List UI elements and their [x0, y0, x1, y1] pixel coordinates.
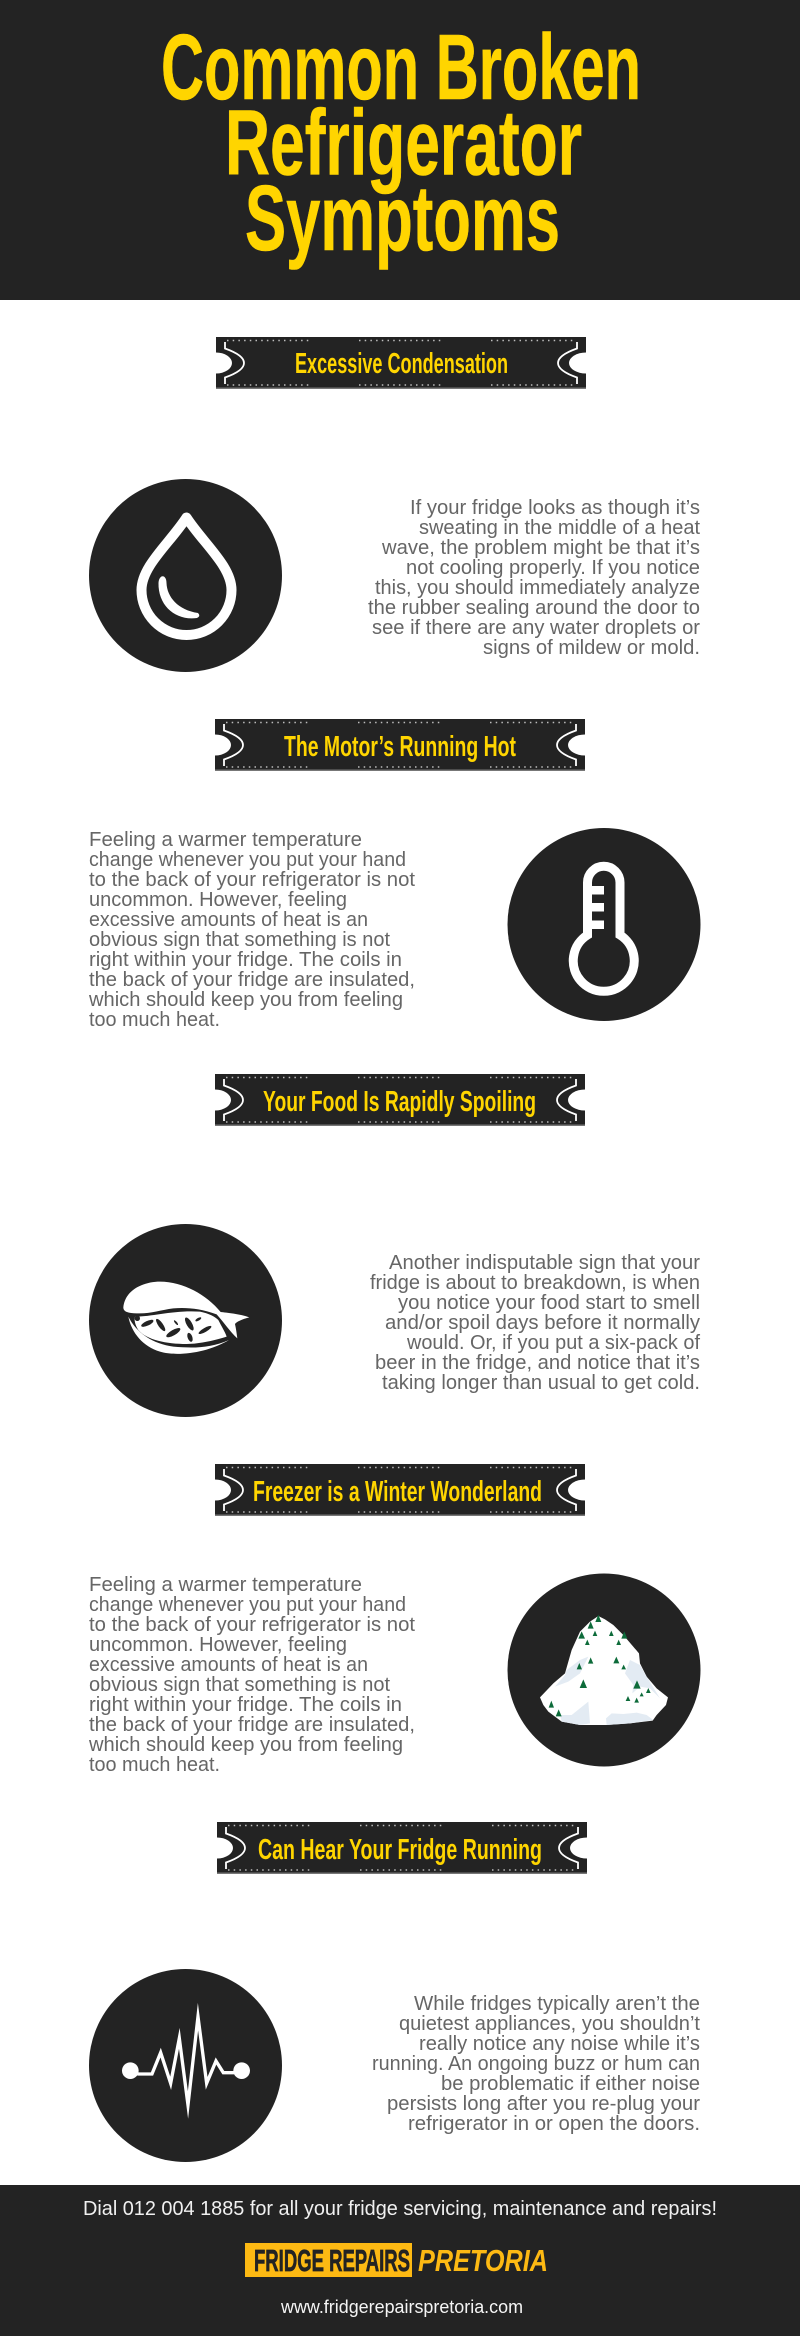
text: spoiling description: and/or spoil days before it normally — [385, 1312, 700, 1334]
text: motor description — [88, 829, 415, 1031]
text: spoiling description: you notice your food start to smell — [398, 1292, 700, 1314]
text: condensation description: not cooling properly. If you notice — [406, 557, 700, 579]
text: condensation description: this, you should immediately analyze — [375, 577, 700, 599]
icon: thermometer — [508, 828, 700, 1021]
text: condensation description: wave, the problem might be that it’s — [381, 537, 700, 559]
text: freezer description: excessive amounts of heat is an — [89, 1654, 368, 1676]
text: motor description: obvious sign that something is not — [89, 929, 390, 951]
text: motor description: too much heat. — [89, 1009, 220, 1031]
text: spoiling description: would. Or, if you put a six-pack of — [406, 1332, 700, 1354]
text: noise description: refrigerator in or open the doors. — [408, 2113, 700, 2135]
text: condensation description: signs of mildew or mold. — [483, 637, 700, 659]
text: motor description: uncommon. However, feeling — [89, 889, 347, 911]
text: noise description: While fridges typically aren’t the — [414, 1993, 700, 2015]
text: freezer description: the back of your fridge are insulated, — [89, 1714, 415, 1736]
text: spoiling description — [370, 1252, 700, 1394]
text: freezer description: which should keep you from feeling — [88, 1734, 403, 1756]
text: freezer description — [88, 1574, 415, 1776]
heading banner: Your Food Is Rapidly Spoiling — [215, 1074, 585, 1126]
text: freezer description: too much heat. — [89, 1754, 220, 1776]
text: noise description: quietest appliances, you shouldn’t — [399, 2013, 700, 2035]
heading banner: Excessive Condensation — [216, 337, 586, 389]
text: spoiling description: Another indisputable sign that your — [389, 1252, 700, 1274]
text: freezer description: Feeling a warmer temperature — [89, 1574, 362, 1596]
text: noise description: persists long after you re-plug your — [387, 2093, 700, 2115]
icon: water drop — [89, 479, 282, 672]
text: freezer description: to the back of your refrigerator is not — [89, 1614, 415, 1636]
heading banner: Freezer is a Winter Wonderland — [215, 1464, 585, 1516]
text: condensation description: sweating in the middle of a heat — [419, 517, 700, 539]
heading banner: Freezer is a Winter Wonderland: Freezer is a Winter Wonderland — [253, 1476, 542, 1508]
header panel with title — [0, 0, 800, 300]
icon: snowy mountain — [508, 1574, 700, 1766]
logo: Fridge Repairs Pretoria: PRETORIA — [418, 2243, 548, 2278]
text: freezer description: obvious sign that something is not — [89, 1674, 390, 1696]
text: noise description: running. An ongoing buzz or hum can — [372, 2053, 700, 2075]
text: spoiling description: taking longer than usual to get cold. — [382, 1372, 700, 1394]
header panel with title: Symptoms — [245, 166, 560, 270]
text: motor description: excessive amounts of heat is an — [89, 909, 368, 931]
text: noise description: be problematic if either noise — [441, 2073, 700, 2095]
heading banner: The Motor's Running Hot — [215, 719, 585, 771]
text: freezer description: uncommon. However, feeling — [89, 1634, 347, 1656]
text: noise description — [372, 1993, 700, 2135]
text: condensation description: see if there are any water droplets or — [372, 617, 700, 639]
text: motor description: the back of your fridge are insulated, — [89, 969, 415, 991]
text: motor description: change whenever you put your hand — [89, 849, 406, 871]
text: spoiling description: beer in the fridge, and notice that it’s — [375, 1352, 700, 1374]
logo: Fridge Repairs Pretoria: FRIDGE REPAIRS — [254, 2243, 410, 2278]
heading banner: Can Hear Your Fridge Running: Can Hear Your Fridge Running — [258, 1834, 542, 1866]
text: condensation description: the rubber sealing around the door to — [368, 597, 700, 619]
header panel with title: Refrigerator — [225, 90, 582, 194]
text: spoiling description: fridge is about to breakdown, is when — [370, 1272, 700, 1294]
text: noise description: really notice any noise while it’s — [419, 2033, 700, 2055]
text: condensation description: If your fridge looks as though it’s — [410, 497, 700, 519]
text: motor description: which should keep you from feeling — [88, 989, 403, 1011]
text: freezer description: right within your fridge. The coils in — [89, 1694, 402, 1716]
heading banner: Excessive Condensation: Excessive Condensation — [295, 348, 508, 380]
icon: spoiled food — [89, 1224, 282, 1417]
heading banner: Can Hear Your Fridge Running — [217, 1822, 587, 1874]
footer panel — [0, 2185, 800, 2336]
call to action text: Dial 012 004 1885 for all your fridge servicing, maintenance and repairs! — [83, 2198, 717, 2220]
text: freezer description: change whenever you put your hand — [89, 1594, 406, 1616]
heading banner: Your Food Is Rapidly Spoiling: Your Food Is Rapidly Spoiling — [263, 1086, 536, 1118]
heading banner: The Motor's Running Hot: The Motor’s Running Hot — [284, 731, 516, 763]
text: motor description: Feeling a warmer temperature — [89, 829, 362, 851]
website: www.fridgerepairspretoria.com — [280, 2297, 523, 2317]
text: condensation description — [368, 497, 700, 659]
text: motor description: right within your fridge. The coils in — [89, 949, 402, 971]
text: motor description: to the back of your refrigerator is not — [89, 869, 415, 891]
icon: sound wave — [89, 1969, 282, 2162]
